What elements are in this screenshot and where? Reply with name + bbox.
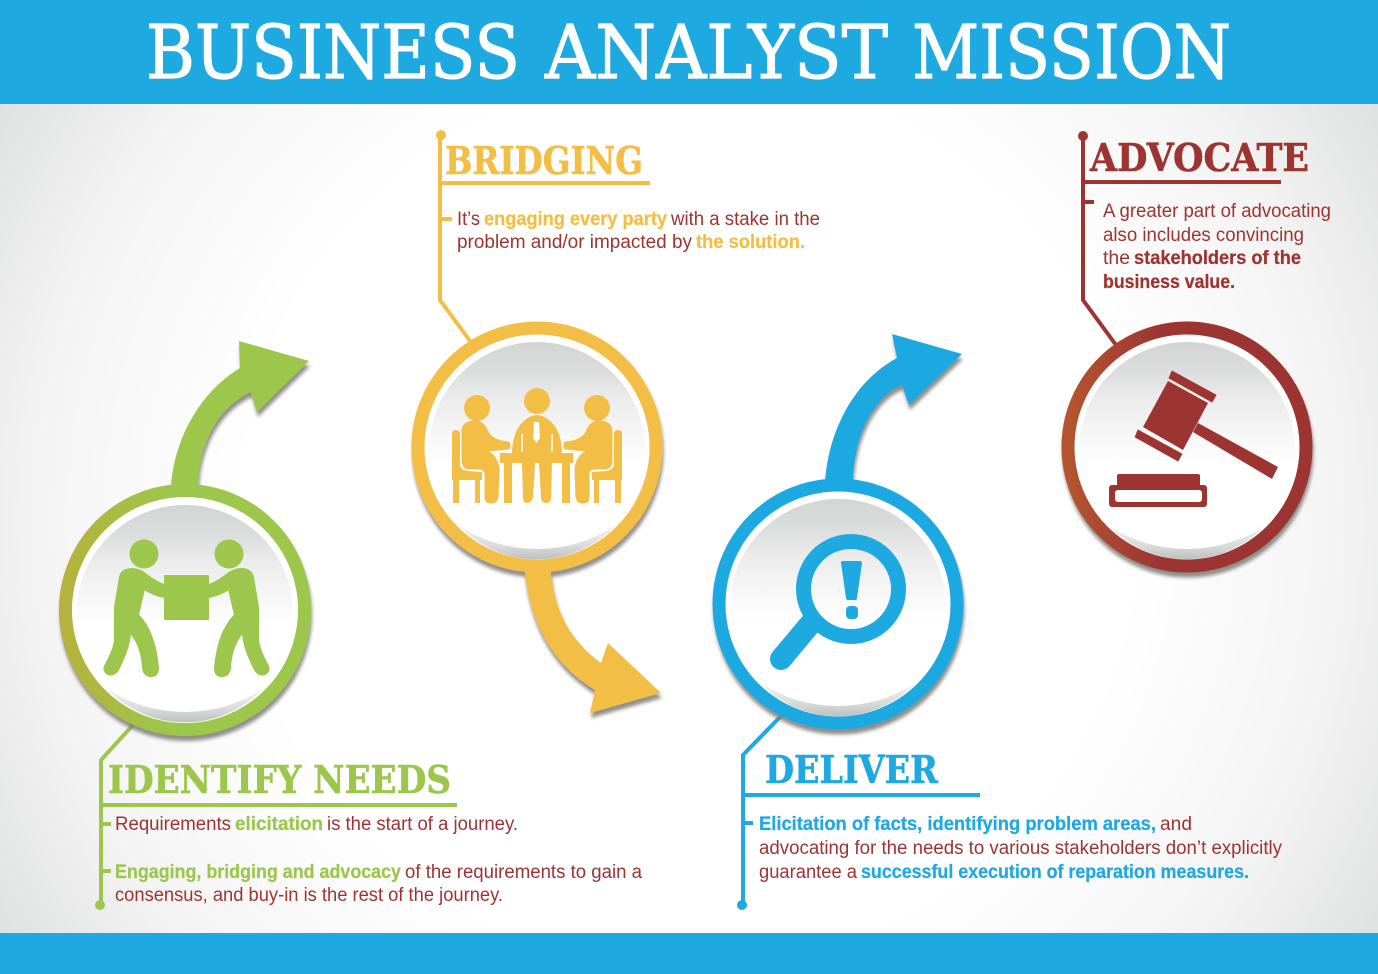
text block: identify needs: Engaging, bridging and advocacy — [115, 862, 401, 883]
connector dot: deliver — [737, 900, 747, 910]
text block: deliver — [759, 814, 1282, 883]
text block: identify needs: is the start of a journey. — [327, 814, 518, 835]
connector dot: identify needs — [95, 900, 105, 910]
text block: identify needs: Requirements — [115, 814, 231, 835]
disc: deliver — [730, 499, 946, 716]
title: MISSION — [912, 10, 1231, 96]
heading: identify needs: IDENTIFY NEEDS — [108, 757, 451, 802]
text block: identify needs: of the requirements to gain a — [405, 862, 642, 883]
connector line: bridging — [440, 135, 650, 341]
text block: bridging: engaging every party — [484, 209, 667, 230]
text block: bridging: problem and/or impacted by — [457, 232, 692, 253]
text block: advocate: stakeholders of the — [1134, 248, 1301, 269]
top banner — [0, 0, 1378, 104]
connector line: advocate — [1083, 136, 1281, 345]
panel: deliver — [719, 334, 1282, 910]
ring and arrow: identify needs — [66, 341, 309, 730]
title — [146, 10, 1231, 96]
text block: bridging — [457, 209, 820, 253]
text block: advocate: also includes convincing — [1103, 225, 1304, 246]
panel: advocate — [1068, 131, 1331, 566]
connector line: deliver — [743, 715, 980, 905]
heading: bridging: BRIDGING — [445, 138, 643, 183]
bottom banner — [0, 933, 1378, 974]
icon: two people carrying a box — [104, 540, 269, 676]
text block: advocate: business value. — [1103, 272, 1235, 293]
connector dot: bridging — [436, 130, 446, 140]
text block: identify needs: consensus, and buy-in is the rest of the journey. — [115, 885, 503, 906]
text block: advocate — [1103, 201, 1331, 293]
panel: identify needs — [66, 341, 642, 910]
heading: advocate: ADVOCATE — [1089, 135, 1309, 180]
panel: bridging — [418, 130, 820, 713]
text block: advocate: the — [1103, 248, 1130, 269]
ring and arrow: deliver — [719, 334, 962, 723]
disc: advocate — [1079, 342, 1295, 559]
text block: deliver: and — [1160, 814, 1192, 835]
ring and arrow: bridging — [418, 328, 661, 713]
text block: deliver: guarantee a — [759, 862, 857, 883]
connector dot: advocate — [1078, 131, 1088, 141]
title: ANALYST — [544, 10, 888, 96]
text block: bridging: It’s — [457, 209, 480, 230]
icon: gavel — [1109, 371, 1278, 507]
text block: bridging: with a stake in the — [670, 209, 820, 230]
disc: identify needs — [77, 505, 293, 722]
text block: identify needs — [115, 814, 642, 906]
text block: bridging: the solution. — [696, 232, 805, 253]
icon: meeting — [452, 388, 622, 503]
connector line: identify needs — [101, 725, 457, 905]
text block: deliver: advocating for the needs to various stakeholders don’t explicitly — [759, 838, 1282, 859]
disc: bridging — [429, 342, 645, 559]
text block: advocate: A greater part of advocating — [1103, 201, 1331, 222]
title: BUSINESS — [146, 10, 520, 96]
icon: magnifier with exclamation mark — [781, 542, 898, 659]
text block: deliver: successful execution of reparation measures. — [861, 862, 1249, 883]
text block: identify needs: elicitation — [235, 814, 323, 835]
text block: deliver: Elicitation of facts, identifying problem areas, — [759, 814, 1156, 835]
heading: deliver: DELIVER — [765, 747, 938, 792]
ring: advocate — [1068, 328, 1306, 566]
